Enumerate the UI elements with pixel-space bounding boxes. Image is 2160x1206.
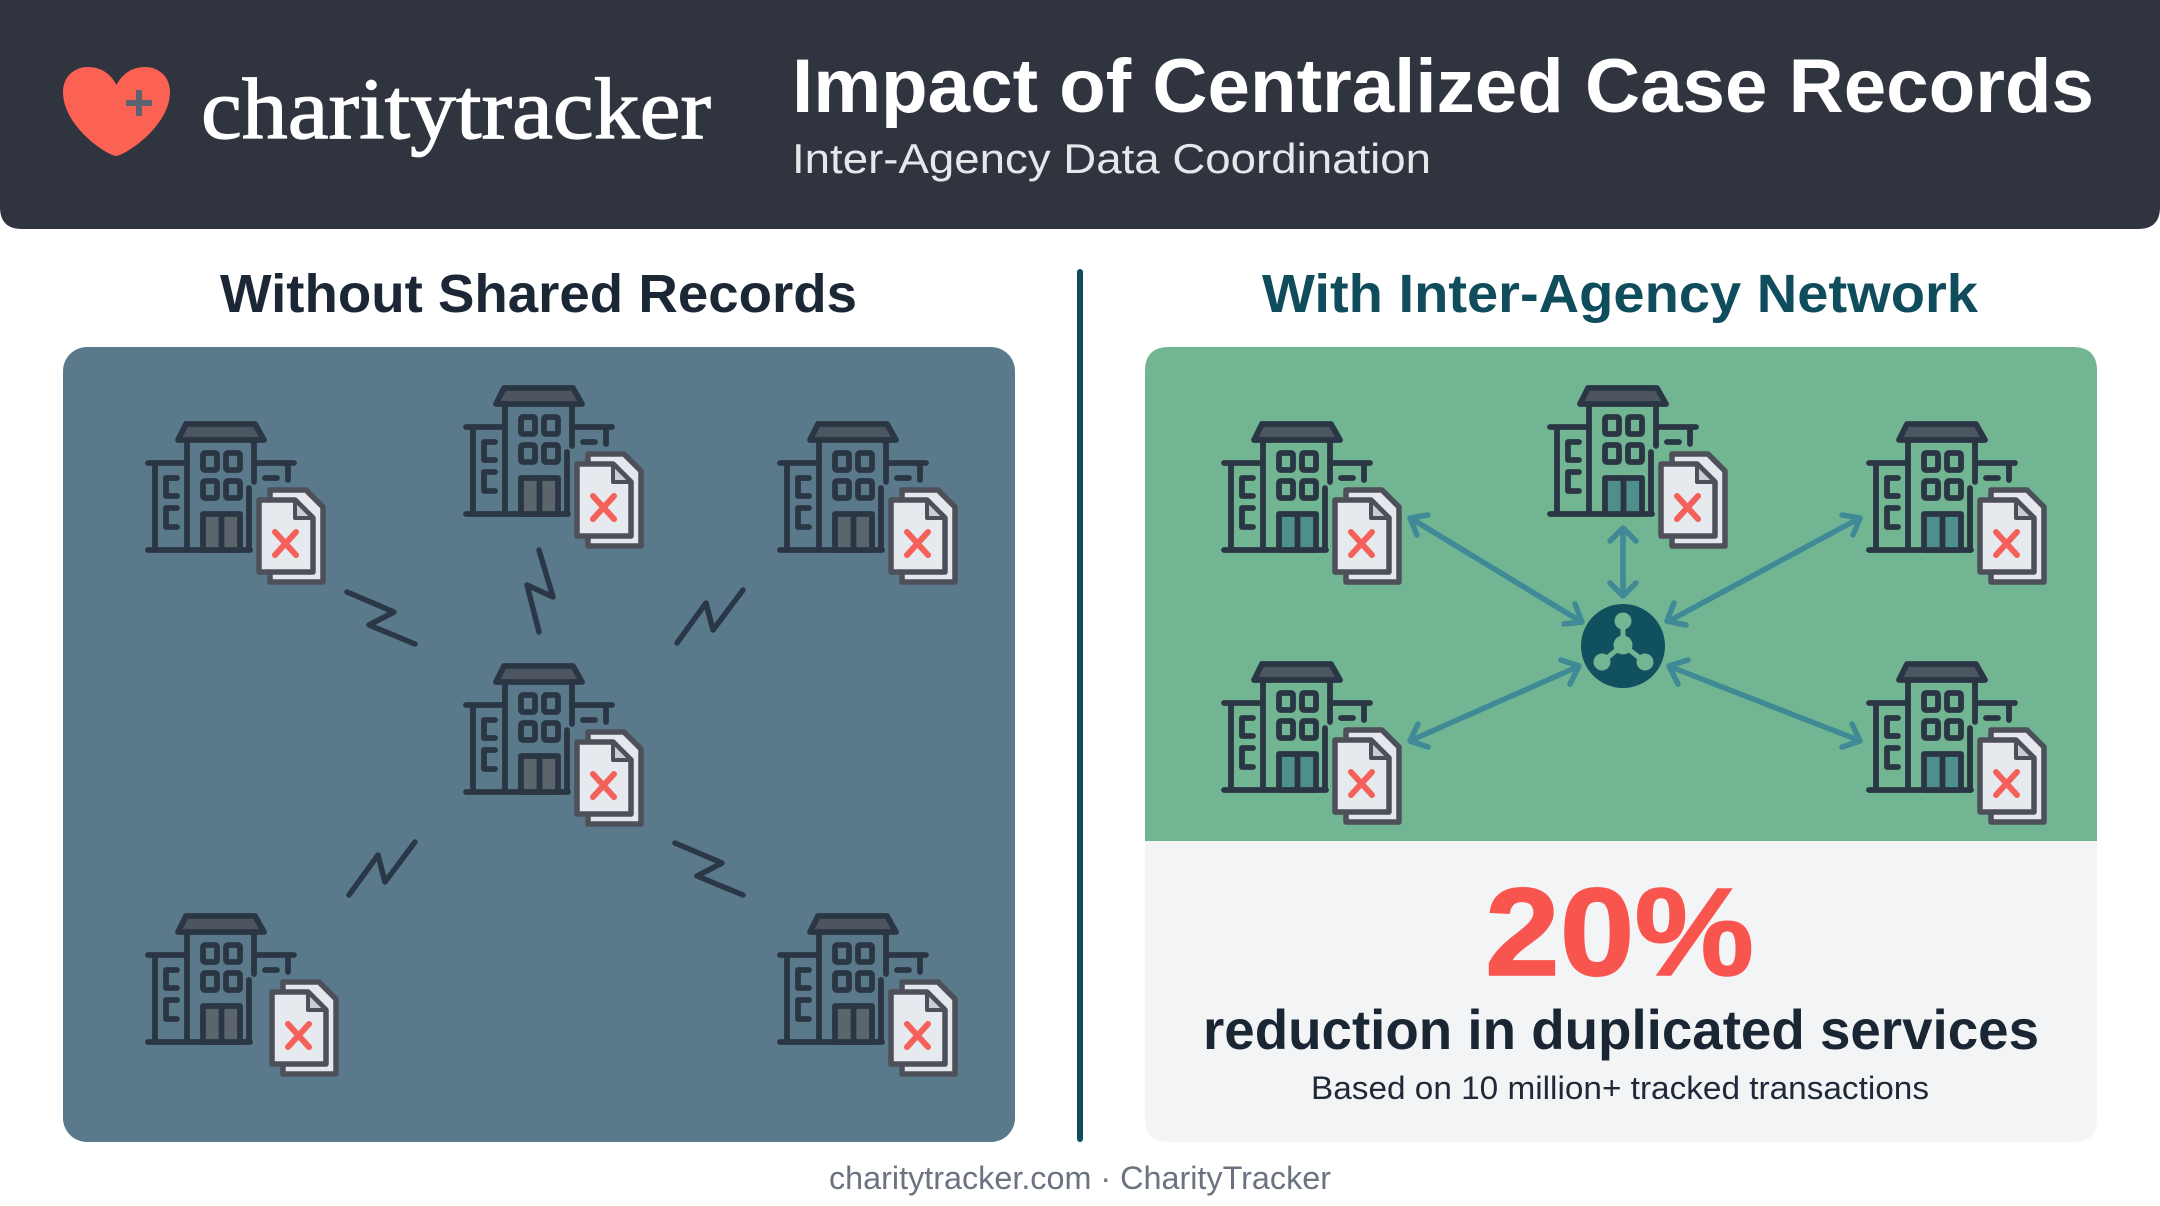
logo wordmark: charitytracker: [201, 60, 711, 157]
icon: broken link bottom right: [675, 843, 743, 895]
heading: with inter-agency network: With Inter-Agency Network: [1262, 264, 1979, 324]
icon: heart with plus: [63, 67, 170, 156]
statistic note: Based on 10 million+ tracked transactions: [1311, 1070, 1929, 1106]
arrow: hub to top right: [1667, 515, 1860, 625]
icon: agency top right: [1869, 424, 2044, 582]
heading: without shared records: Without Shared Records: [220, 264, 857, 324]
icon: broken link bottom left: [349, 842, 415, 895]
arrow: hub to top left: [1410, 515, 1582, 624]
statistic label: reduction in duplicated services: [1203, 998, 2039, 1061]
arrow: hub to top center: [1610, 528, 1636, 596]
icon: agency top left: [148, 424, 323, 582]
icon: agency top center: [1550, 388, 1725, 546]
panel: without shared records: [63, 347, 1015, 1142]
panel: result statistic: [1145, 841, 2097, 1142]
icon: broken link top center: [527, 550, 553, 632]
big number: 20%: [1485, 863, 1754, 1002]
footer: charitytracker.com · CharityTracker: [829, 1160, 1331, 1196]
icon: agency bottom left: [148, 916, 336, 1074]
icon: agency bottom left: [1224, 664, 1399, 822]
center divider: [1077, 269, 1083, 1142]
title: Impact of Centralized Case Records: [792, 44, 2094, 129]
icon: broken link top right: [677, 590, 743, 643]
icon: central network hub: [1581, 604, 1665, 688]
header banner: [0, 0, 2160, 229]
icon: broken link top left: [347, 592, 415, 644]
icon: agency top center: [466, 388, 641, 546]
icon: agency top left: [1224, 424, 1399, 582]
icon: agency bottom right: [780, 916, 955, 1074]
arrow: hub to bottom right: [1669, 660, 1860, 747]
icon: agency bottom right: [1869, 664, 2044, 822]
subtitle: Inter-Agency Data Coordination: [792, 135, 1431, 182]
icon: agency top right: [780, 424, 955, 582]
arrow: hub to bottom left: [1410, 660, 1579, 747]
panel: with inter-agency network: [1145, 347, 2097, 841]
icon: agency center: [466, 666, 641, 824]
